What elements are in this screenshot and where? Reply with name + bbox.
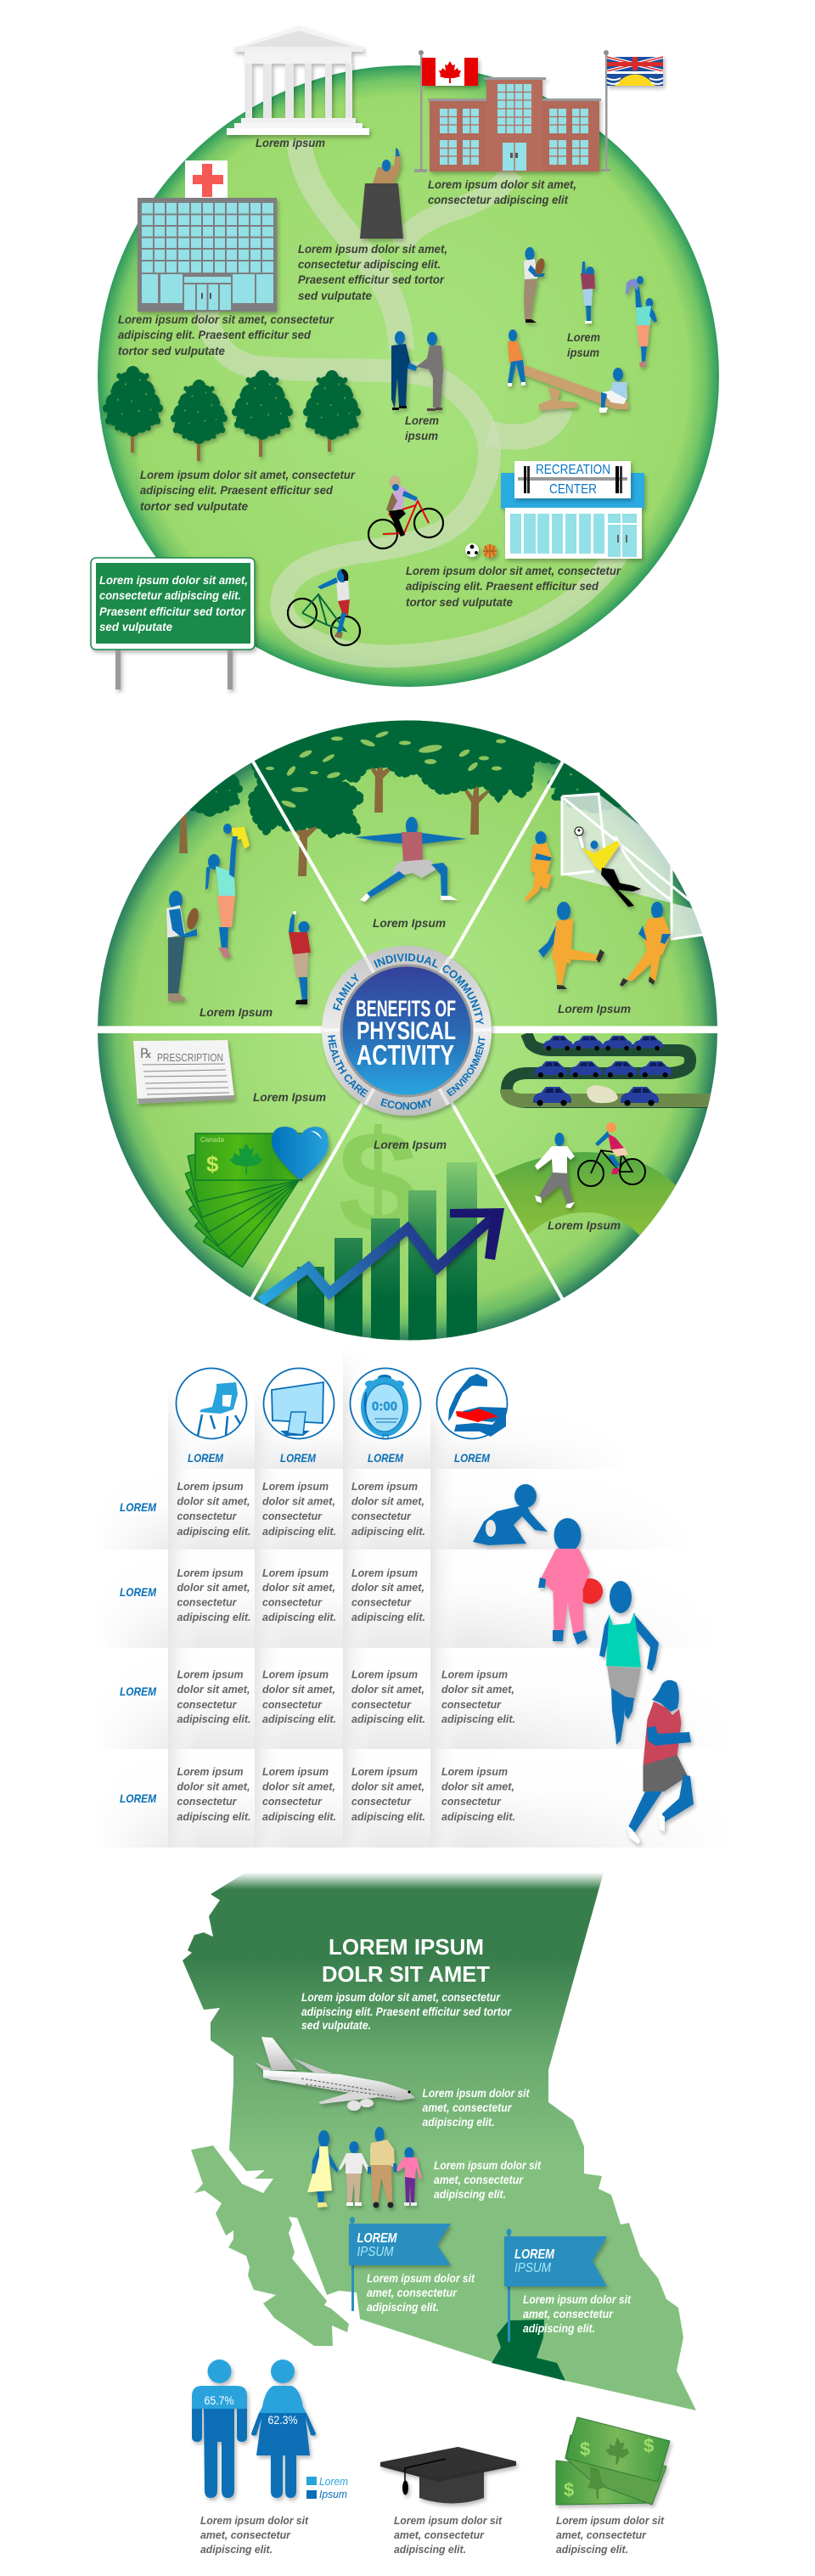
table shading — [93, 1347, 730, 1848]
trees — [103, 366, 361, 461]
caption: education: adipiscing elit. — [394, 2543, 466, 2556]
row 4 cells: dolor sit amet, — [441, 1780, 514, 1793]
text: family: adipiscing elit. — [434, 2187, 506, 2201]
row 3 cells: consectetur — [351, 1698, 412, 1711]
row headers — [120, 1500, 156, 1805]
ring labels: ECONOMY — [380, 1098, 431, 1110]
column headers — [188, 1451, 490, 1465]
row 4 cells: dolor sit amet, — [177, 1780, 250, 1793]
icon: soccer ball and basketball — [465, 543, 497, 558]
row 3 cells: Lorem ipsum — [351, 1668, 418, 1681]
label: handshake: Lorem — [405, 413, 439, 427]
caption: people: Lorem ipsum dolor sit — [200, 2514, 309, 2527]
recreation center — [501, 461, 644, 559]
row 4 cells: Lorem ipsum — [262, 1765, 329, 1778]
text: family: amet, consectetur — [434, 2173, 524, 2186]
caption: income: adipiscing elit. — [556, 2543, 628, 2556]
row 3 cells — [177, 1668, 515, 1725]
row 4 cells: consectetur — [351, 1795, 412, 1808]
text: school: Lorem ipsum dolor sit amet, — [428, 177, 576, 191]
wedge dividers — [93, 762, 722, 1300]
row 4 cells: adipiscing elit. — [262, 1810, 336, 1823]
row 1 cells — [177, 1480, 425, 1538]
panel: activity guideline table — [93, 1347, 730, 1848]
row headers: LOREM — [120, 1585, 156, 1599]
panel: benefits wheel — [98, 720, 717, 1340]
recreation center: RECREATION — [536, 463, 610, 477]
map title: LOREM IPSUM — [329, 1934, 484, 1960]
cyclist on green bicycle — [288, 569, 360, 645]
row 3 cells: consectetur — [441, 1698, 502, 1711]
text: recreation: tortor sed vulputate — [406, 595, 513, 609]
text: hospital — [118, 312, 334, 357]
row 3 cells: dolor sit amet, — [177, 1683, 250, 1696]
text: recreation — [406, 564, 621, 609]
fan of banknotes and heart: Canada — [200, 1136, 225, 1144]
icon: stopwatch: 0:00 — [372, 1399, 397, 1414]
handshake — [391, 331, 443, 411]
winding paths — [206, 140, 624, 656]
icon: banknotes: $ — [580, 2438, 590, 2460]
road sign: consectetur adipiscing elit. — [99, 588, 241, 602]
row 3 cells: Lorem ipsum — [441, 1668, 508, 1681]
row 4 cells: adipiscing elit. — [441, 1810, 515, 1823]
text: flag 1: amet, consectetur — [367, 2286, 458, 2299]
ring labels: ENVIRONMENT — [447, 1036, 486, 1097]
row 2 cells: consectetur — [262, 1596, 323, 1608]
percent labels: 65.7% — [204, 2393, 234, 2407]
text: hospital: Lorem ipsum dolor sit amet, consectetur — [118, 312, 334, 326]
map intro text: Lorem ipsum dolor sit amet, consectetur — [301, 1990, 501, 2004]
icon: screens — [263, 1369, 334, 1438]
icon: banknotes: $ — [644, 2435, 654, 2456]
wedge: family play — [166, 824, 311, 1004]
figure: toddler with ball — [538, 1518, 603, 1645]
prescription pad — [133, 1040, 234, 1104]
prescription pad: ℞ — [140, 1047, 152, 1061]
figure: running child — [599, 1581, 659, 1745]
caption: income: Lorem ipsum dolor sit — [556, 2514, 665, 2527]
icon: stopwatch — [350, 1369, 421, 1439]
label: handshake — [405, 413, 439, 442]
panel: community map disc — [98, 25, 719, 687]
row 4 cells: adipiscing elit. — [351, 1810, 425, 1823]
row 3 cells: adipiscing elit. — [351, 1713, 425, 1725]
family group — [307, 2127, 422, 2208]
text: airplane — [423, 2086, 531, 2129]
row 3 cells: adipiscing elit. — [262, 1713, 336, 1725]
text: family: Lorem ipsum dolor sit — [434, 2158, 542, 2172]
row 2 cells: Lorem ipsum — [262, 1566, 329, 1579]
row 2 cells: Lorem ipsum — [177, 1566, 244, 1579]
text: flag 2 — [523, 2292, 632, 2335]
trees behind wedges — [177, 713, 709, 939]
flag marker 2: LOREM — [514, 2247, 555, 2262]
text: statue: Praesent efficitur sed tortor — [298, 273, 445, 286]
row headers: LOREM — [120, 1500, 156, 1514]
center badge — [321, 946, 496, 1121]
recreation center: CENTER — [549, 482, 597, 497]
badge title: PHYSICAL — [357, 1017, 456, 1045]
map title — [322, 1934, 490, 1987]
row 2 cells: dolor sit amet, — [262, 1581, 335, 1594]
row 3 cells: dolor sit amet, — [262, 1683, 335, 1696]
row 2 cells — [177, 1566, 425, 1623]
row 1 cells: Lorem ipsum — [177, 1480, 244, 1493]
text: recreation: Lorem ipsum dolor sit amet, consectetur — [406, 564, 621, 577]
caption: people: adipiscing elit. — [200, 2543, 273, 2556]
flag marker 1: LOREM — [357, 2231, 397, 2246]
caption: education: Lorem ipsum dolor sit — [394, 2514, 503, 2527]
row 1 cells: consectetur — [262, 1510, 323, 1522]
panel: British Columbia map — [183, 1872, 696, 2410]
row 3 cells: consectetur — [177, 1698, 237, 1711]
airplane — [255, 2037, 415, 2111]
text: school: consectetur adipiscing elit — [428, 193, 569, 206]
ring labels — [328, 953, 486, 1110]
dark silhouette — [492, 2320, 565, 2381]
bank building — [227, 25, 369, 135]
ring labels: COMMUNITY — [443, 965, 484, 1024]
figure: running teen — [626, 1680, 694, 1844]
icon: banknotes: $ — [564, 2479, 574, 2500]
text: school — [428, 177, 576, 206]
soccer goal — [562, 794, 709, 939]
label: play: Lorem — [567, 330, 600, 344]
fan of banknotes and heart — [185, 1127, 329, 1267]
text: family — [434, 2158, 542, 2201]
map title: DOLR SIT AMET — [322, 1961, 490, 1987]
text: trees — [140, 468, 356, 513]
caption: education — [394, 2514, 503, 2556]
text: flag 2: amet, consectetur — [523, 2307, 614, 2320]
text: statue — [298, 242, 447, 302]
road sign — [91, 558, 255, 689]
row 4 cells: consectetur — [177, 1795, 237, 1808]
row 1 cells: consectetur — [351, 1510, 412, 1522]
row 2 cells: consectetur — [177, 1596, 237, 1608]
row 2 cells: dolor sit amet, — [177, 1581, 250, 1594]
text: airplane: adipiscing elit. — [423, 2115, 494, 2129]
text: flag 2: adipiscing elit. — [523, 2321, 595, 2335]
label: health care wedge: Lorem Ipsum — [253, 1090, 326, 1104]
text: flag 1: adipiscing elit. — [367, 2300, 439, 2314]
row 4 cells — [177, 1765, 515, 1823]
row 2 cells: consectetur — [351, 1596, 412, 1608]
row 1 cells: consectetur — [177, 1510, 237, 1522]
male figure — [192, 2359, 247, 2498]
road sign: Lorem ipsum dolor sit amet, — [99, 573, 248, 587]
text: statue: Lorem ipsum dolor sit amet, — [298, 242, 447, 256]
column headers: LOREM — [454, 1451, 490, 1465]
icon: banknotes — [556, 2417, 670, 2505]
wedge: community soccer — [525, 827, 671, 989]
text: airplane: Lorem ipsum dolor sit — [423, 2086, 531, 2100]
legend: Ipsum — [319, 2488, 347, 2500]
caption: people — [200, 2514, 309, 2556]
row 2 cells: adipiscing elit. — [177, 1611, 251, 1623]
flag marker 2: IPSUM — [514, 2261, 552, 2275]
row 3 cells: consectetur — [262, 1698, 323, 1711]
row 1 cells: Lorem ipsum — [262, 1480, 329, 1493]
row 3 cells: adipiscing elit. — [177, 1713, 251, 1725]
row 3 cells: Lorem ipsum — [177, 1668, 244, 1681]
text: trees: adipiscing elit. Praesent efficitur sed — [140, 483, 333, 497]
text: trees: Lorem ipsum dolor sit amet, consectetur — [140, 468, 356, 481]
row 2 cells: dolor sit amet, — [351, 1581, 424, 1594]
row 3 cells: dolor sit amet, — [441, 1683, 514, 1696]
school building with flags — [414, 50, 663, 172]
column headers: LOREM — [368, 1451, 403, 1465]
row 1 cells: dolor sit amet, — [262, 1494, 335, 1508]
text: statue: consectetur adipiscing elit. — [298, 257, 441, 271]
row 4 cells: consectetur — [262, 1795, 323, 1808]
wedge: individual yoga — [355, 817, 467, 902]
figure: crawling baby — [473, 1484, 548, 1545]
road sign: sed vulputate — [99, 620, 172, 633]
seesaw with children — [508, 329, 628, 413]
people playing catch — [524, 247, 657, 368]
percent labels: 62.3% — [268, 2413, 297, 2427]
row headers: LOREM — [120, 1791, 156, 1805]
icon: graduation cap — [380, 2447, 516, 2503]
label: bank: Lorem ipsum — [256, 136, 325, 149]
text: airplane: amet, consectetur — [423, 2101, 513, 2114]
text: hospital: adipiscing elit. Praesent efficitur sed — [118, 328, 311, 341]
row 4 cells: Lorem ipsum — [441, 1765, 508, 1778]
text: flag 1: Lorem ipsum dolor sit — [367, 2271, 475, 2285]
row 4 cells: dolor sit amet, — [262, 1780, 335, 1793]
text: hospital: tortor sed vulputate — [118, 344, 225, 357]
row 2 cells: adipiscing elit. — [262, 1611, 336, 1623]
row 4 cells: consectetur — [441, 1795, 502, 1808]
prescription pad: PRESCRIPTION — [157, 1051, 223, 1064]
wedge: environment roads, cars, hill — [494, 1033, 722, 1238]
badge title — [356, 996, 456, 1071]
caption: income: amet, consectetur — [556, 2528, 647, 2541]
text: statue: sed vulputate — [298, 289, 372, 302]
chart: male and female pictograms — [192, 2359, 348, 2500]
map intro text: adipiscing elit. Praesent efficitur sed tortor — [301, 2005, 512, 2018]
row 1 cells: adipiscing elit. — [351, 1525, 425, 1538]
wedge: economy chart — [258, 1124, 504, 1340]
row 1 cells: Lorem ipsum — [351, 1480, 418, 1493]
label: play — [567, 330, 600, 359]
row headers: LOREM — [120, 1685, 156, 1698]
row 4 cells: dolor sit amet, — [351, 1780, 424, 1793]
map intro text — [301, 1990, 512, 2032]
row 2 cells: Lorem ipsum — [351, 1566, 418, 1579]
wedge: economy chart: $ — [338, 1101, 418, 1263]
flag: British Columbia — [607, 57, 663, 86]
percent labels — [204, 2393, 297, 2427]
caption: income — [556, 2514, 665, 2556]
ring labels: INDIVIDUAL — [374, 953, 438, 968]
female figure — [251, 2359, 316, 2498]
hospital — [138, 160, 277, 312]
row 1 cells: dolor sit amet, — [351, 1494, 424, 1508]
flag: Canada — [422, 58, 478, 86]
cyclist on red bicycle — [368, 475, 443, 548]
row 1 cells: adipiscing elit. — [177, 1525, 251, 1538]
ring labels: FAMILY — [333, 973, 358, 1010]
row 3 cells: Lorem ipsum — [262, 1668, 329, 1681]
text: recreation: adipiscing elit. Praesent efficitur sed — [406, 579, 599, 593]
row 3 cells: dolor sit amet, — [351, 1683, 424, 1696]
column headers: LOREM — [280, 1451, 316, 1465]
label: play: ipsum — [567, 346, 599, 359]
ring labels: HEALTH CARE — [328, 1035, 368, 1098]
row 4 cells: Lorem ipsum — [351, 1765, 418, 1778]
cyclist on hill — [578, 1122, 645, 1186]
text: flag 2: Lorem ipsum dolor sit — [523, 2292, 632, 2306]
column headers: LOREM — [188, 1451, 223, 1465]
row 1 cells: adipiscing elit. — [262, 1525, 336, 1538]
label: economy wedge: Lorem Ipsum — [374, 1138, 447, 1151]
text: flag 1 — [367, 2271, 475, 2314]
row 2 cells: adipiscing elit. — [351, 1611, 425, 1623]
statue on pedestal — [360, 148, 403, 239]
legend: Lorem — [319, 2475, 348, 2488]
icon: school chair — [177, 1369, 246, 1438]
row 1 cells: dolor sit amet, — [177, 1494, 250, 1508]
badge title: ACTIVITY — [357, 1039, 454, 1071]
label: individual wedge: Lorem Ipsum — [373, 916, 446, 930]
legend — [306, 2475, 348, 2500]
row 4 cells: adipiscing elit. — [177, 1810, 251, 1823]
flag marker 1: IPSUM — [357, 2245, 394, 2259]
map intro text: sed vulputate. — [301, 2018, 371, 2032]
label: environment wedge: Lorem Ipsum — [548, 1218, 621, 1232]
caption: education: amet, consectetur — [394, 2528, 485, 2541]
badge title: BENEFITS OF — [356, 996, 456, 1021]
icon: flexed arm — [436, 1369, 508, 1438]
row 4 cells: Lorem ipsum — [177, 1765, 244, 1778]
road sign: Praesent efficitur sed tortor — [99, 605, 246, 618]
flag marker 1 — [349, 2217, 451, 2311]
caption: people: amet, consectetur — [200, 2528, 291, 2541]
label: family wedge: Lorem Ipsum — [200, 1005, 273, 1019]
label: community wedge: Lorem Ipsum — [558, 1002, 631, 1015]
flag marker 2 — [504, 2229, 607, 2342]
row 3 cells: adipiscing elit. — [441, 1713, 515, 1725]
label: handshake: ipsum — [405, 429, 438, 442]
text: trees: tortor sed vulputate — [140, 499, 248, 513]
fan of banknotes and heart: $ — [206, 1151, 219, 1177]
walker — [535, 1133, 575, 1208]
inlets — [213, 2146, 360, 2324]
